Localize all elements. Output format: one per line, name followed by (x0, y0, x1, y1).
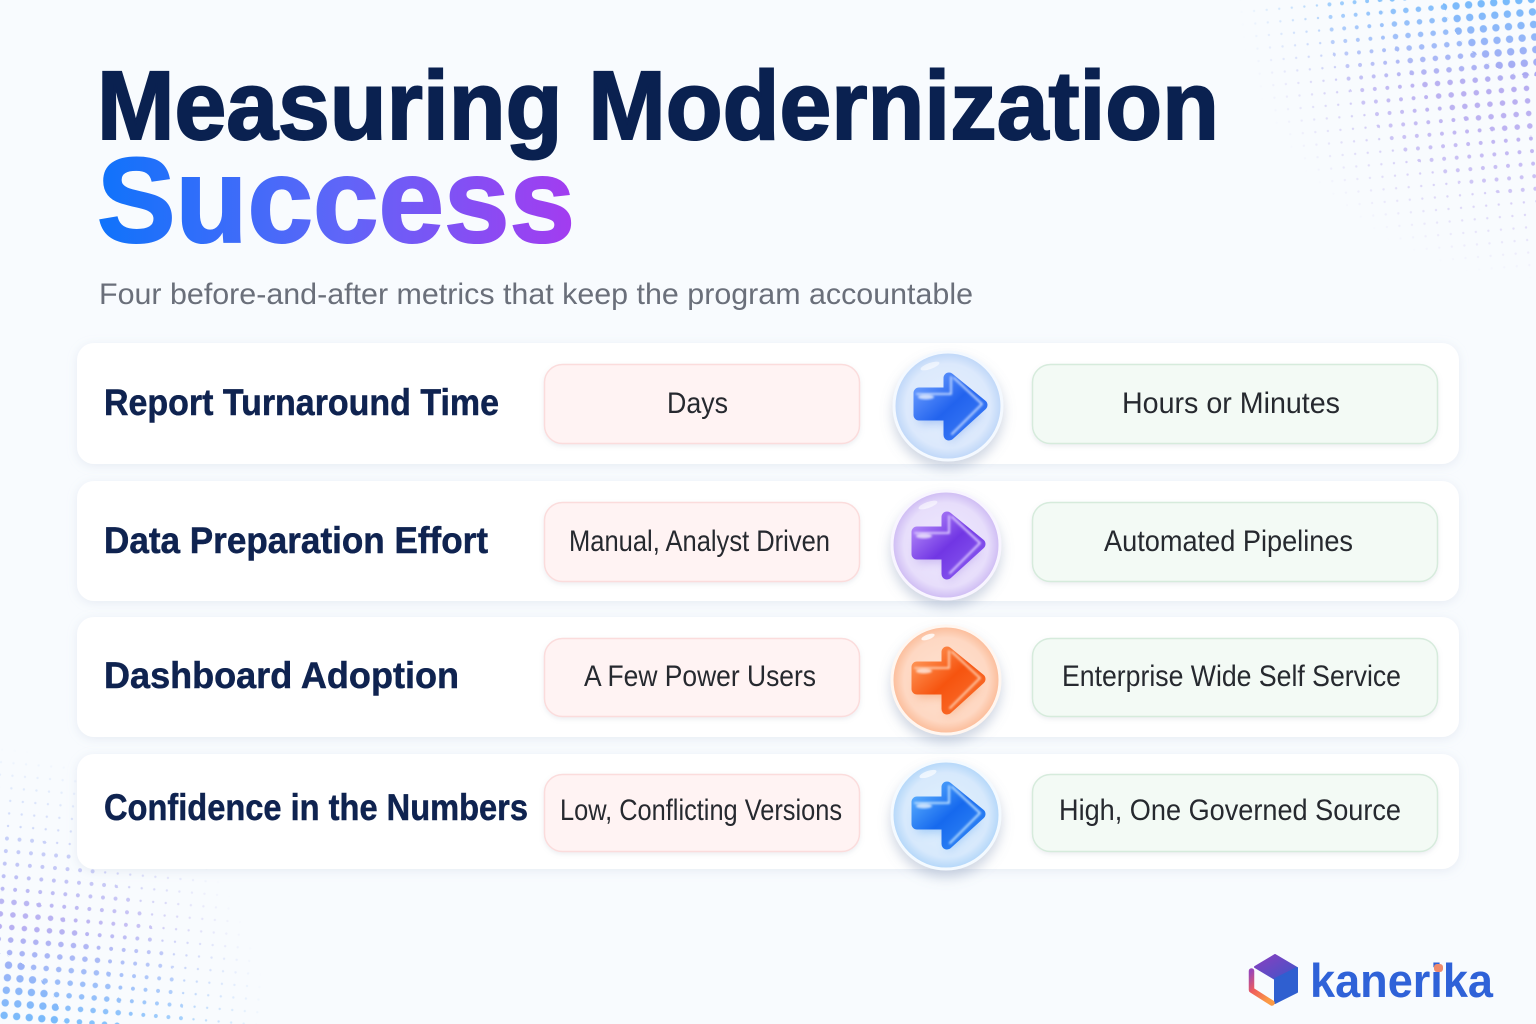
row 1 before pill: Days (667, 387, 728, 420)
icon: cube (1252, 955, 1297, 1003)
row 3 card (77, 617, 1459, 737)
wordmark: kanerika (1310, 954, 1494, 1007)
wordmark i dot (1434, 964, 1443, 972)
title line: Success: Success (97, 132, 575, 268)
row 2 after pill (1032, 502, 1438, 582)
row 2 card (77, 481, 1459, 601)
row 4 after pill (1032, 774, 1438, 852)
row 1 after pill (1032, 364, 1438, 444)
halftone dots: top right (1253, 0, 1536, 265)
row 1 metric label: Report Turnaround Time (104, 382, 499, 423)
panel: row 1 report turnaround time (77, 343, 1459, 464)
row 4 arrow icon (892, 761, 1000, 869)
row 1 arrow icon (894, 352, 1002, 460)
panel: row 4 confidence in the numbers (77, 754, 1459, 869)
row 2 before pill (544, 502, 860, 582)
row 3 before pill: A Few Power Users (584, 660, 816, 693)
row 3 before pill (544, 638, 860, 716)
title line: Measuring Modernization: Measuring Modernization (97, 51, 1219, 160)
row 1 before pill (544, 364, 860, 444)
row 2 before pill: Manual, Analyst Driven (569, 525, 830, 558)
row 3 after pill (1032, 638, 1438, 716)
row 2 metric label: Data Preparation Effort (104, 520, 488, 561)
row 2 after pill: Automated Pipelines (1104, 525, 1353, 558)
row 1 after pill: Hours or Minutes (1122, 387, 1340, 420)
panel: row 3 dashboard adoption (77, 617, 1459, 737)
subtitle: Four before-and-after metrics that keep the program accountable (99, 278, 973, 311)
row 4 metric label: Confidence in the Numbers (104, 787, 528, 828)
title (97, 51, 1219, 268)
halftone dots: bottom left (0, 761, 258, 1024)
row 2 arrow icon (892, 491, 1000, 599)
row 3 metric label: Dashboard Adoption (104, 655, 459, 696)
row 1 card (77, 343, 1459, 464)
row 4 after pill: High, One Governed Source (1059, 794, 1401, 827)
row 4 before pill: Low, Conflicting Versions (560, 794, 842, 827)
row 4 card (77, 754, 1459, 869)
panel: row 2 data preparation effort (77, 481, 1459, 601)
row 3 after pill: Enterprise Wide Self Service (1062, 660, 1401, 693)
logo: kanerika (1252, 954, 1494, 1007)
row 3 arrow icon (892, 626, 1000, 734)
row 4 before pill (544, 774, 860, 852)
